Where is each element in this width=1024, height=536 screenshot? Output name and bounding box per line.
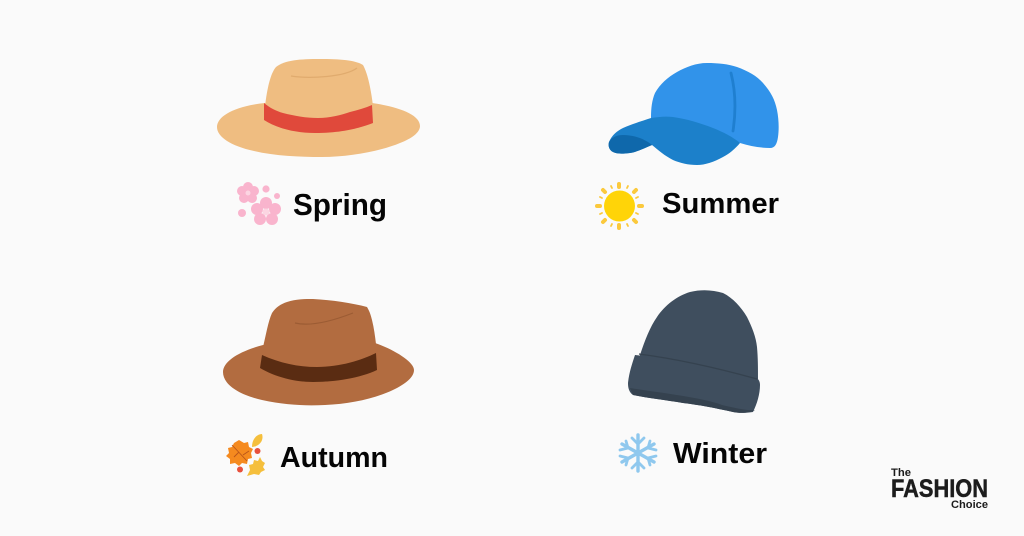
- icon: straw hat: [217, 59, 420, 157]
- heading: autumn: Autumn: [280, 442, 388, 474]
- heading: winter: Winter: [673, 438, 767, 470]
- icon: cherry blossoms: [237, 182, 281, 225]
- icon: autumn leaves: [226, 434, 265, 476]
- icon: beanie: [628, 290, 760, 413]
- panel: autumn: [223, 299, 414, 476]
- panel: spring: [217, 59, 420, 225]
- logo: The Fashion Choice: The: [891, 467, 911, 479]
- panel: summer: [597, 63, 779, 228]
- icon: snowflake: [620, 435, 656, 471]
- panel: winter: [620, 290, 767, 471]
- logo: The Fashion Choice: [891, 467, 988, 511]
- logo: The Fashion Choice: Choice: [951, 499, 988, 511]
- heading: spring: Spring: [293, 188, 387, 222]
- heading: summer: Summer: [662, 188, 779, 220]
- icon: brown fedora: [223, 299, 414, 405]
- logo: The Fashion Choice: FASHION: [891, 475, 988, 503]
- icon: sun: [597, 184, 642, 228]
- icon: blue baseball cap: [609, 63, 779, 165]
